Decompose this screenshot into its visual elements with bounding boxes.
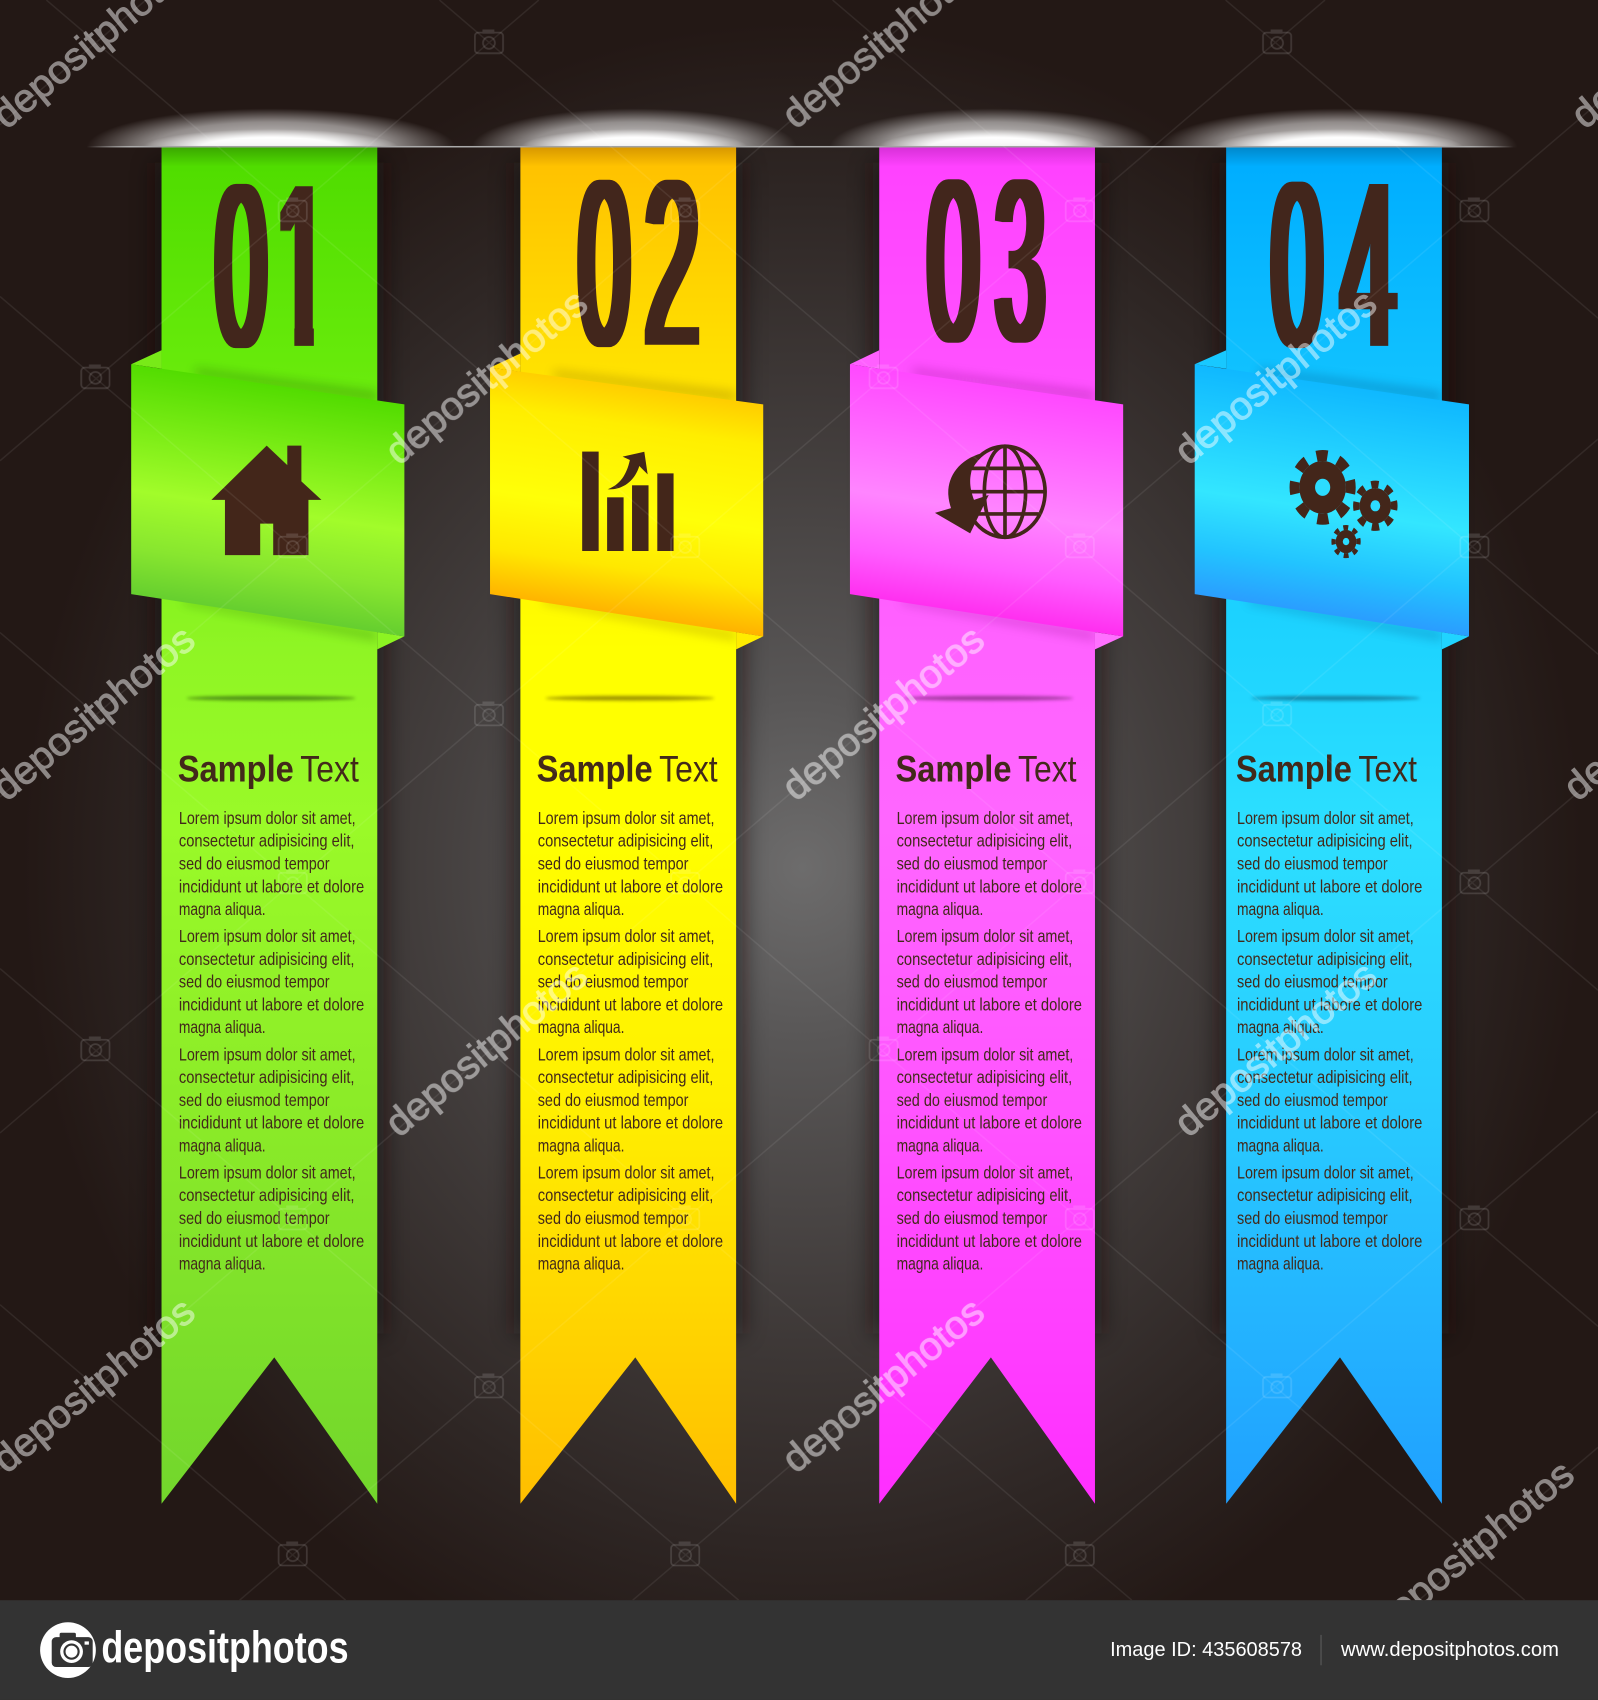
number 04 xyxy=(1271,133,1396,397)
watermark overlay: depositphotos xyxy=(377,954,596,1145)
wrapped band xyxy=(850,364,1123,636)
number 01: 1 xyxy=(276,137,328,396)
watermark overlay: depositphotos xyxy=(774,1290,993,1481)
body text: sed do eiusmod tempor xyxy=(538,1208,689,1228)
number 03 xyxy=(928,133,1045,391)
number 01: 0 xyxy=(215,137,267,396)
body text: consectetur adipisicing elit, xyxy=(897,949,1072,969)
body text: sed do eiusmod tempor xyxy=(1237,854,1388,874)
wrapped band xyxy=(1195,364,1469,636)
body text: incididunt ut labore et dolore xyxy=(897,994,1082,1014)
number 02 xyxy=(579,132,699,396)
footer bar xyxy=(0,1600,1598,1700)
body text: magna aliqua. xyxy=(897,1017,983,1037)
body text: Lorem ipsum dolor sit amet, xyxy=(538,926,714,946)
body text: magna aliqua. xyxy=(1237,1135,1324,1155)
body text: sed do eiusmod tempor xyxy=(1237,1208,1388,1228)
number 03: 3 xyxy=(995,133,1045,391)
body text xyxy=(538,808,723,1274)
body text: incididunt ut labore et dolore xyxy=(538,994,723,1014)
icon: bar chart with arrow xyxy=(582,452,674,551)
body text: sed do eiusmod tempor xyxy=(1237,1090,1388,1110)
body text: incididunt ut labore et dolore xyxy=(1237,1231,1422,1251)
body text: consectetur adipisicing elit, xyxy=(1237,1067,1413,1087)
watermark overlay: depositphotos xyxy=(1166,954,1385,1145)
panel: 01 green xyxy=(131,137,404,1504)
body text: Lorem ipsum dolor sit amet, xyxy=(1237,808,1414,828)
heading: Sample xyxy=(178,749,294,790)
wrapped band xyxy=(131,364,404,636)
body text: sed do eiusmod tempor xyxy=(897,854,1047,874)
body text: incididunt ut labore et dolore xyxy=(179,994,364,1014)
body text: sed do eiusmod tempor xyxy=(897,972,1047,992)
heading: Sample xyxy=(1236,749,1352,790)
body text: magna aliqua. xyxy=(1237,1017,1324,1037)
body text: magna aliqua. xyxy=(179,1135,266,1155)
body text: magna aliqua. xyxy=(897,1135,983,1155)
body text: incididunt ut labore et dolore xyxy=(897,1113,1082,1133)
body text: Lorem ipsum dolor sit amet, xyxy=(897,808,1073,828)
body text: consectetur adipisicing elit, xyxy=(179,1185,355,1205)
heading: Text xyxy=(659,749,718,790)
body text: incididunt ut labore et dolore xyxy=(1237,1113,1422,1133)
body text: incididunt ut labore et dolore xyxy=(538,876,723,896)
body text: magna aliqua. xyxy=(179,1017,266,1037)
ribbon shadows xyxy=(155,163,1448,1334)
wrapped band xyxy=(490,368,763,636)
number 02: 0 xyxy=(579,133,630,396)
body text: Lorem ipsum dolor sit amet, xyxy=(538,808,714,828)
body text: Lorem ipsum dolor sit amet, xyxy=(1237,1044,1414,1064)
body text: consectetur adipisicing elit, xyxy=(538,1067,713,1087)
watermark overlay: depositphotos xyxy=(377,281,596,473)
body text: sed do eiusmod tempor xyxy=(538,972,689,992)
body text: consectetur adipisicing elit, xyxy=(179,949,355,969)
body text: sed do eiusmod tempor xyxy=(179,1208,330,1228)
body text: consectetur adipisicing elit, xyxy=(1237,831,1413,851)
icon: gears xyxy=(1294,456,1394,556)
body text: incididunt ut labore et dolore xyxy=(538,1231,723,1251)
body text: magna aliqua. xyxy=(1237,1254,1324,1274)
body text: magna aliqua. xyxy=(538,1017,624,1037)
body text: sed do eiusmod tempor xyxy=(179,972,330,992)
watermark overlay: depositphotos xyxy=(1364,1452,1582,1644)
body text: consectetur adipisicing elit, xyxy=(538,831,713,851)
body text xyxy=(1237,808,1422,1274)
body text: Lorem ipsum dolor sit amet, xyxy=(897,1044,1073,1064)
body text: consectetur adipisicing elit, xyxy=(897,1185,1072,1205)
body text: sed do eiusmod tempor xyxy=(538,1090,689,1110)
body text: magna aliqua. xyxy=(538,899,624,919)
heading: Text xyxy=(1358,749,1417,790)
body text: incididunt ut labore et dolore xyxy=(179,1113,364,1133)
body text: consectetur adipisicing elit, xyxy=(1237,1185,1413,1205)
body text: magna aliqua. xyxy=(538,1254,624,1274)
number 03: 0 xyxy=(928,133,979,390)
body text: consectetur adipisicing elit, xyxy=(897,831,1072,851)
body text: sed do eiusmod tempor xyxy=(897,1090,1047,1110)
body text: consectetur adipisicing elit, xyxy=(179,1067,355,1087)
body text: Lorem ipsum dolor sit amet, xyxy=(538,1162,714,1182)
body text: Lorem ipsum dolor sit amet, xyxy=(179,926,356,946)
body text: Lorem ipsum dolor sit amet, xyxy=(897,926,1073,946)
body text: consectetur adipisicing elit, xyxy=(1237,949,1413,969)
body text: sed do eiusmod tempor xyxy=(538,854,689,874)
panel: 04 blue xyxy=(1195,133,1469,1504)
body text: magna aliqua. xyxy=(179,899,266,919)
body text: consectetur adipisicing elit, xyxy=(538,949,713,969)
heading: Sample xyxy=(895,749,1011,790)
body text: incididunt ut labore et dolore xyxy=(179,876,364,896)
body text: Lorem ipsum dolor sit amet, xyxy=(179,1162,356,1182)
body text xyxy=(179,808,364,1274)
body text: Lorem ipsum dolor sit amet, xyxy=(897,1162,1073,1182)
body text: magna aliqua. xyxy=(179,1254,266,1274)
body text: Lorem ipsum dolor sit amet, xyxy=(538,1044,714,1064)
body text: incididunt ut labore et dolore xyxy=(1237,876,1422,896)
icon: house xyxy=(211,446,321,555)
body text: magna aliqua. xyxy=(538,1135,624,1155)
body text: magna aliqua. xyxy=(897,1254,983,1274)
panel: 03 magenta xyxy=(850,133,1123,1504)
body text: magna aliqua. xyxy=(1237,899,1324,919)
lamp glows and top line xyxy=(88,110,1514,148)
body text: Lorem ipsum dolor sit amet, xyxy=(1237,1162,1414,1182)
body text xyxy=(897,808,1082,1274)
body text: consectetur adipisicing elit, xyxy=(538,1185,713,1205)
body text: incididunt ut labore et dolore xyxy=(1237,994,1422,1014)
body text: consectetur adipisicing elit, xyxy=(179,831,355,851)
body text: sed do eiusmod tempor xyxy=(897,1208,1047,1228)
number 02: 2 xyxy=(645,132,699,396)
body text: sed do eiusmod tempor xyxy=(179,1090,330,1110)
body text: consectetur adipisicing elit, xyxy=(897,1067,1072,1087)
icon: globe with arrow xyxy=(935,446,1046,538)
number 04: 0 xyxy=(1271,133,1323,396)
number 04: 4 xyxy=(1341,134,1396,397)
body text: incididunt ut labore et dolore xyxy=(538,1113,723,1133)
image id: Image ID: 435608578 xyxy=(1110,1639,1302,1661)
body text: Lorem ipsum dolor sit amet, xyxy=(179,808,356,828)
body text: Lorem ipsum dolor sit amet, xyxy=(1237,926,1414,946)
body text: Lorem ipsum dolor sit amet, xyxy=(179,1044,356,1064)
heading: Text xyxy=(1018,749,1077,790)
website: www.depositphotos.com xyxy=(1340,1639,1559,1661)
body text: incididunt ut labore et dolore xyxy=(179,1231,364,1251)
body text: incididunt ut labore et dolore xyxy=(897,1231,1082,1251)
body text: incididunt ut labore et dolore xyxy=(897,876,1082,896)
footer logo text: depositphotos xyxy=(101,1624,349,1673)
heading: Sample xyxy=(537,749,653,790)
watermark overlay: depositphotos xyxy=(1166,281,1385,473)
watermark overlay: depositphotos xyxy=(774,618,993,809)
heading: Text xyxy=(300,749,359,790)
body text: sed do eiusmod tempor xyxy=(1237,972,1388,992)
panel: 02 yellow xyxy=(490,132,763,1504)
body text: magna aliqua. xyxy=(897,899,983,919)
footer logo mark xyxy=(40,1622,96,1678)
body text: sed do eiusmod tempor xyxy=(179,854,330,874)
number 01 xyxy=(214,184,314,348)
